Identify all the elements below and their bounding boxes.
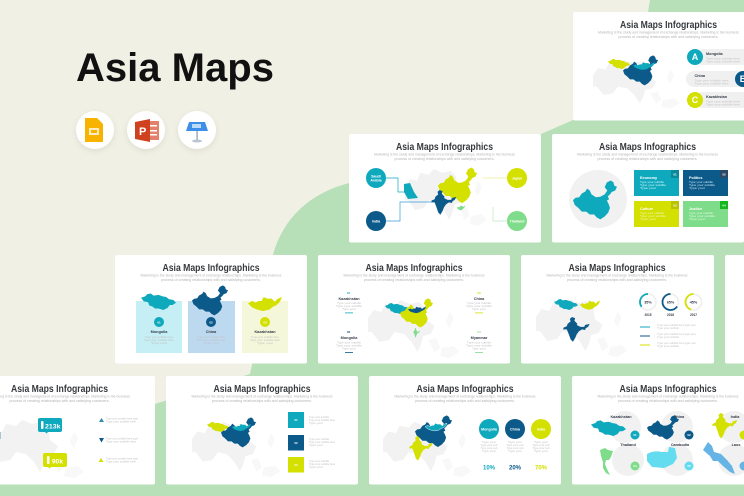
badge: Saudi Arabia: Saudi [371, 174, 381, 178]
item: China: 02 [687, 433, 691, 437]
slide subtitle: process of creating relationships with and satisfying customers. [618, 399, 718, 403]
column: China: China [206, 330, 217, 334]
box: Justice: 04 [722, 204, 726, 208]
slide subtitle [0, 394, 130, 403]
label: Myanmar: 04 [477, 330, 481, 334]
stat: India 70%: Type your [534, 440, 548, 444]
donut: 65% [662, 294, 678, 317]
legend row up [99, 416, 139, 424]
donut: 65%: 65% [667, 300, 675, 304]
square 02: 02 [294, 441, 298, 445]
slide subtitle [394, 394, 536, 403]
stat: China 20%: China [510, 428, 521, 432]
badge C: Kazakhstan: Type your subtitle here [706, 102, 741, 106]
item: Cambodia: Cambodia [671, 443, 690, 447]
square 02: Type your subtitle here [309, 440, 336, 444]
column: Kazakhstan: Type your [257, 341, 273, 345]
slide subtitle: Marketing is the study and management of exchange relationships. Marketing is the business [577, 152, 718, 156]
stat: India 70%: Type your sub [532, 443, 550, 447]
box: Economy: Type your [640, 186, 656, 190]
box: Justice: Type your subtitle [689, 214, 716, 218]
badge C: Kazakhstan [687, 92, 744, 108]
label: Mongolia: Type your subtitle [337, 340, 362, 344]
callout: 213k [38, 418, 62, 434]
stat: China 20%: Type your sub [506, 446, 524, 450]
stat: Mongolia 10%: Type your [482, 449, 496, 453]
item: Cambodia: 05 [687, 464, 691, 468]
item: India [712, 411, 744, 443]
box: Politics: Type your [689, 186, 705, 190]
legend: Type your subtitle [657, 326, 680, 330]
slide: three badges map [573, 12, 744, 120]
stat: China 20%: Type your [508, 449, 522, 453]
square 01: Type your subtitle [309, 415, 330, 419]
column: Mongolia: Mongolia [151, 330, 168, 334]
slide title: Asia Maps Infographics [416, 384, 514, 395]
square 03: Type your [309, 465, 323, 469]
stat: India 70% [531, 419, 551, 472]
legend row down [99, 436, 139, 444]
label: Myanmar: Type your [472, 346, 486, 350]
item: Thailand: Thailand [620, 443, 636, 447]
column: China: Type your subtitle here [196, 338, 227, 342]
donut: 45%: 2017 [690, 313, 697, 317]
stat: China 20%: Type your sub [506, 443, 524, 447]
map [0, 420, 84, 478]
icon: PowerPoint: P [139, 126, 146, 138]
map [192, 417, 280, 477]
box: Culture [634, 201, 679, 227]
slide subtitle: process of creating relationships with and satisfying customers. [161, 278, 261, 282]
item: Laos [703, 442, 744, 476]
slide title: Asia Maps Infographics [162, 263, 260, 274]
stat: China 20%: 20% [509, 466, 522, 472]
slide subtitle: Marketing is the study and management of exchange relationships. Marketing is the business [394, 394, 536, 398]
item: Kazakhstan: Kazakhstan [610, 415, 632, 419]
box: Economy: 01 [673, 172, 677, 176]
slide subtitle: Marketing is the study and management of exchange relationships. Marketing is the business [140, 274, 282, 278]
box: Politics: Type your subtitle [689, 180, 714, 184]
square 03 [288, 457, 336, 472]
stat: China 20%: Type your [508, 440, 522, 444]
slide subtitle [598, 394, 739, 403]
badge: Thailand [507, 211, 527, 231]
badge: Japan: Japan [512, 176, 522, 180]
heading: Asia Maps: Asia Maps [76, 46, 274, 90]
slide title: Asia Maps Infographics [366, 263, 463, 274]
badge B: China: Type your subtitle here [694, 78, 729, 82]
legend row down: Type your subtitle here [106, 440, 137, 444]
column: Kazakhstan [242, 297, 288, 353]
box: Justice: Type your [689, 217, 705, 221]
square 03: 03 [294, 463, 298, 467]
stat: India 70%: India [537, 428, 546, 432]
slide: three country columns [115, 255, 307, 364]
slide subtitle [546, 274, 688, 282]
label: Myanmar: Myanmar [471, 336, 488, 340]
box: Culture: Type your subtitle [640, 214, 667, 218]
slide subtitle: Marketing is the study and management of exchange relationships. Marketing is the business [598, 394, 739, 398]
box: Culture: Type your subtitle [640, 211, 665, 215]
column: Kazakhstan: Type your subtitle here [250, 338, 281, 342]
badge: Saudi Arabia [366, 168, 386, 188]
slide subtitle: Marketing is the study and management of exchange relationships. Marketing is the business [344, 274, 485, 278]
label: Kazakhstan: Type your subtitle [337, 301, 362, 305]
map [383, 415, 471, 477]
slide subtitle: process of creating relationships with and satisfying customers. [364, 278, 464, 282]
label: China: Type your [472, 307, 486, 311]
box: Politics: Type your subtitle [689, 183, 716, 187]
badge B: China [686, 71, 744, 87]
map [536, 299, 627, 357]
column: China [188, 285, 235, 353]
box: Justice: Justice [689, 207, 702, 211]
legend [640, 323, 696, 348]
slide subtitle: Marketing is the study and management of exchange relationships. Marketing is the business [546, 274, 688, 278]
map [368, 298, 459, 358]
label: Mongolia [336, 330, 363, 353]
item: Kazakhstan [591, 411, 641, 443]
slide subtitle [140, 274, 282, 282]
label: Kazakhstan: 01 [347, 291, 350, 295]
square 01: Type your [309, 421, 323, 425]
square 01: 01 [294, 418, 298, 422]
label: Myanmar: Type your subtitle [467, 340, 492, 344]
slide subtitle: process of creating relationships with and satisfying customers. [10, 399, 110, 403]
callout: 90k [43, 453, 67, 468]
column: Mongolia: Type your subtitle here [145, 335, 174, 339]
item: Thailand: 04 [633, 464, 637, 468]
slide subtitle: process of creating relationships with and satisfying customers. [618, 35, 719, 39]
box: Politics: Politics [689, 176, 703, 180]
icon: PowerPoint [127, 111, 165, 149]
badge C: Kazakhstan: Kazakhstan [706, 95, 728, 99]
map circle [569, 170, 627, 228]
slide: map with four labels [318, 255, 510, 364]
legend row lime [98, 456, 139, 464]
square 01: Type your subtitle here [309, 418, 336, 422]
label: Myanmar: Type your subtitle [466, 344, 493, 348]
column: Mongolia: 01 [157, 320, 161, 324]
box: Culture: Type your [640, 217, 656, 221]
badge B: China: China [694, 74, 706, 78]
column: Mongolia [136, 293, 182, 353]
badge: India: India [372, 220, 381, 224]
stat: India 70%: 70% [535, 466, 548, 472]
box: Economy: Type your subtitle [640, 180, 665, 184]
badge C: Kazakhstan: Type your subtitle here [706, 100, 741, 104]
square 03: Type your subtitle here [309, 462, 336, 466]
label: Mongolia: Mongolia [341, 336, 358, 340]
column: Kazakhstan: Type your subtitle here [251, 335, 280, 339]
column: China: 02 [209, 320, 213, 324]
badge: Japan [507, 168, 527, 188]
box: Culture: Culture [640, 207, 653, 211]
box: Justice: Type your subtitle [689, 211, 714, 215]
item: Thailand [600, 443, 644, 476]
donut: 35%: 35% [644, 300, 652, 304]
column: Mongolia: Type your [151, 341, 167, 345]
badge B: China: Type your subtitle here [694, 82, 729, 86]
badge: India [366, 211, 386, 231]
map [593, 55, 679, 108]
donut: 45% [686, 294, 702, 317]
legend: Type your subtitle here type your [657, 341, 696, 345]
slide subtitle: Marketing is the study and management of exchange relationships. Marketing is the business [192, 394, 333, 398]
donut: 65%: 2016 [667, 313, 674, 317]
column: Kazakhstan: Kazakhstan [254, 330, 276, 334]
column: China: Type your subtitle here [197, 335, 226, 339]
stat: China 20% [505, 419, 525, 472]
stat: India 70%: Type your sub [532, 446, 550, 450]
slide subtitle: process of creating relationships with and satisfying customers. [394, 157, 495, 161]
badge: Thailand: Thailand [510, 220, 524, 224]
slide: numbered squares [166, 376, 358, 484]
label: China: Type your subtitle [467, 301, 492, 305]
stat: Mongolia 10%: Type your [482, 440, 496, 444]
square 02: Type your subtitle [309, 437, 330, 441]
stat: Mongolia 10%: Type your sub [480, 443, 498, 447]
icon: Keynote [178, 111, 216, 149]
callout: 213k: 213k [45, 424, 61, 430]
badge C: Kazakhstan: C [692, 95, 699, 105]
column: China: Type your [203, 341, 219, 345]
column: Kazakhstan: 03 [263, 320, 267, 324]
item: India: India [731, 415, 740, 419]
item: China: China [674, 415, 685, 419]
slide subtitle: Marketing is the study and management of exchange relationships. Marketing is the business [374, 152, 515, 156]
legend row down: Type your subtitle here type [106, 436, 139, 440]
box: Economy [634, 170, 679, 196]
square 03: Type your subtitle [309, 459, 330, 463]
badge A: Mongolia: Type your subtitle here [706, 60, 741, 64]
slide subtitle: process of creating relationships with and satisfying customers. [598, 157, 698, 161]
slide subtitle [577, 152, 718, 161]
label: Kazakhstan: Kazakhstan [338, 297, 360, 301]
slide: connector map [349, 134, 541, 242]
slide subtitle: Marketing is the study and management of exchange relationships. Marketing is the business [598, 30, 739, 34]
square 02 [288, 435, 336, 450]
slide title: Asia Maps Infographics [620, 20, 717, 31]
box: Economy: Type your subtitle [640, 183, 667, 187]
label: China: China [474, 297, 485, 301]
box: Economy: Economy [640, 176, 658, 180]
item: China [647, 411, 694, 443]
legend: Type your subtitle [657, 344, 680, 348]
label: China: 03 [477, 291, 481, 295]
icon: Google Slides [76, 111, 114, 149]
legend row up: Type your subtitle here [106, 420, 137, 424]
label: Mongolia: Type your [342, 346, 356, 350]
stat: Mongolia 10%: Type your sub [480, 446, 498, 450]
slide title: Asia Maps Infographics [568, 263, 666, 274]
badge A: Mongolia [687, 49, 744, 65]
column: Mongolia: Type your subtitle here [144, 338, 175, 342]
legend: Type your subtitle here type your [657, 323, 696, 327]
box: Politics: 02 [722, 172, 726, 176]
slide title: Asia Maps Infographics [599, 142, 696, 153]
slide subtitle: process of creating relationships with and satisfying customers. [567, 278, 667, 282]
badge A: Mongolia: A [692, 52, 699, 62]
slide subtitle: process of creating relationships with and satisfying customers. [415, 399, 515, 403]
label: China [466, 291, 493, 313]
square 01 [288, 412, 336, 428]
slide title: Asia Maps Infographics [11, 384, 108, 395]
slide: cropped blank edge [725, 255, 744, 364]
item: Cambodia [647, 443, 694, 476]
callout: 90k: 90k [52, 458, 63, 466]
item: Kazakhstan: 01 [633, 433, 637, 437]
box: Politics [683, 170, 728, 196]
legend row lime: Type your subtitle here type [106, 456, 139, 460]
box: Justice [683, 201, 728, 227]
slide title: Asia Maps Infographics [620, 384, 717, 395]
connector lines [386, 178, 507, 221]
badge: Saudi Arabia: Arabia [370, 178, 383, 182]
slide: China with four boxes [552, 134, 744, 242]
stat: Mongolia 10%: 10% [483, 466, 496, 472]
label: Kazakhstan [336, 291, 363, 313]
donut: 35% [640, 294, 656, 317]
label: Myanmar [466, 330, 493, 353]
legend: Type your subtitle here type your [657, 332, 696, 336]
donut: 45%: 45% [690, 300, 698, 304]
legend: Type your subtitle [657, 335, 680, 339]
slide subtitle [192, 394, 333, 403]
badge A: Mongolia: Mongolia [706, 52, 724, 56]
square 02: Type your [309, 443, 323, 447]
slide title: Asia Maps Infographics [214, 384, 311, 395]
slide: percentage circles [369, 376, 561, 484]
label: Mongolia: Type your subtitle [336, 344, 363, 348]
stat: Mongolia 10%: Mongolia [481, 428, 498, 432]
stat: Mongolia 10% [479, 419, 499, 472]
label: Kazakhstan: Type your subtitle [336, 304, 363, 308]
slide subtitle [598, 30, 739, 39]
slide title: Asia Maps Infographics [396, 142, 493, 153]
map [404, 167, 487, 226]
slide: map with donut charts [521, 255, 714, 364]
label: Kazakhstan: Type your [342, 307, 356, 311]
legend row up: Type your subtitle here type [106, 416, 139, 420]
slide subtitle [344, 274, 485, 282]
donut: 35%: 2015 [644, 313, 652, 317]
slide: population callouts [0, 376, 155, 484]
slide subtitle: process of creating relationships with and satisfying customers. [212, 399, 312, 403]
item: Laos: Laos [732, 443, 740, 447]
label: China: Type your subtitle [466, 304, 493, 308]
slide subtitle [374, 152, 515, 161]
legend row lime: Type your subtitle here [106, 460, 137, 464]
slide: six country maps [572, 376, 744, 484]
badge A: Mongolia: Type your subtitle here [706, 56, 741, 60]
label: Mongolia: 02 [347, 330, 350, 334]
stat: India 70%: Type your [534, 449, 548, 453]
box: Culture: 03 [673, 204, 677, 208]
